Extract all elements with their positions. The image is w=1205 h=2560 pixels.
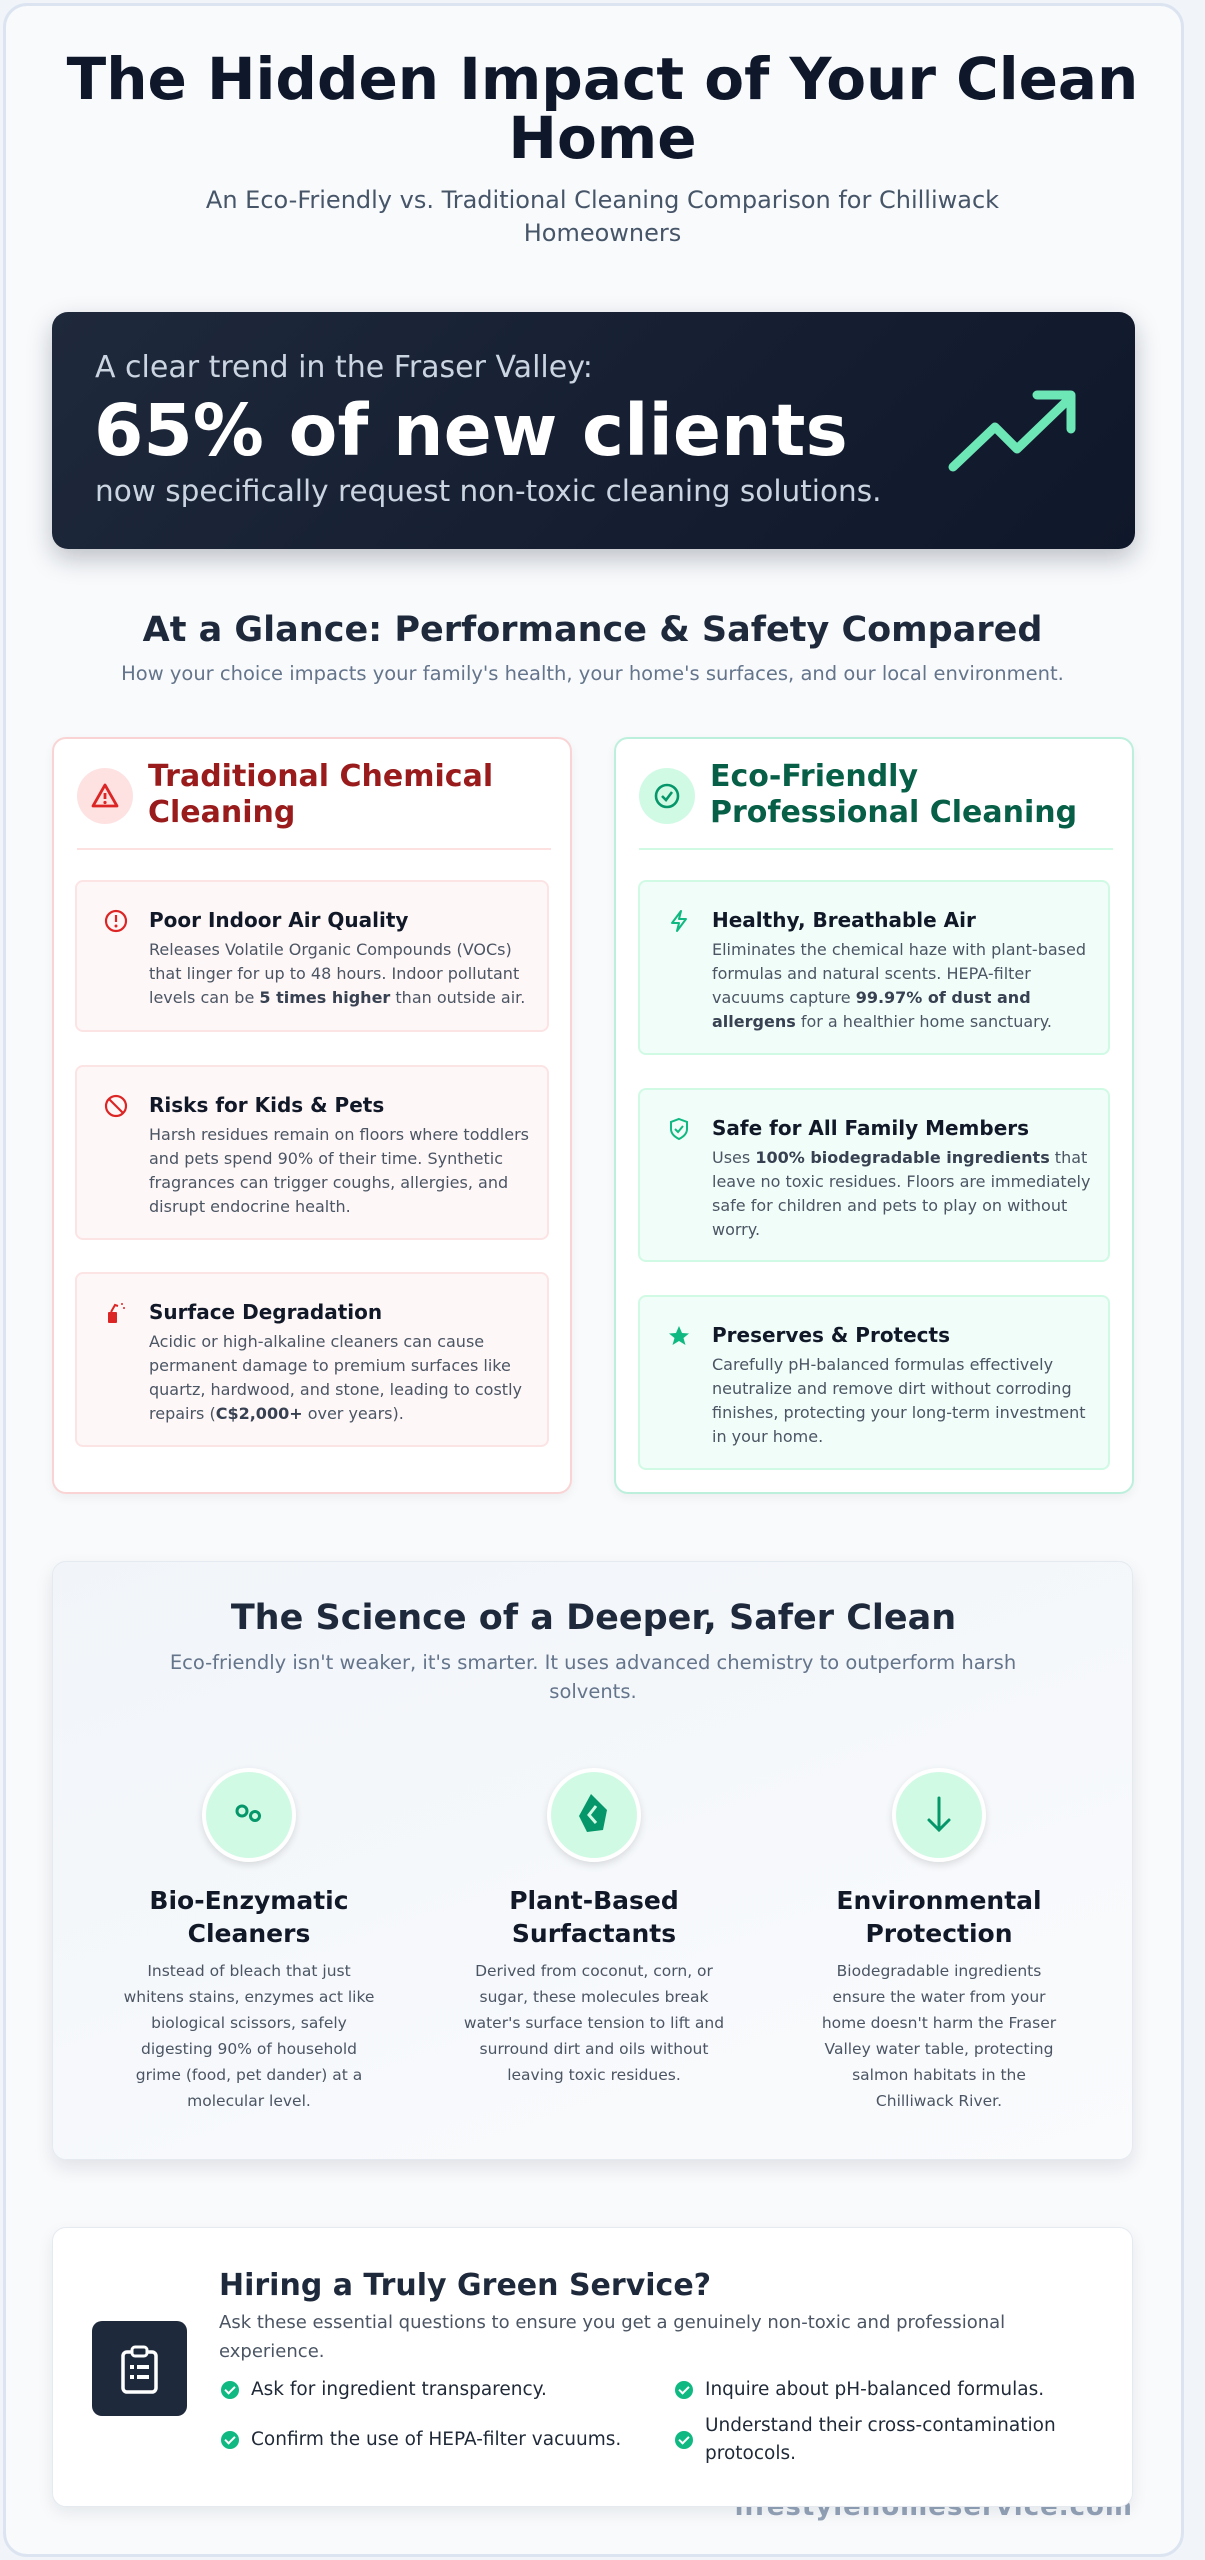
panel: hiring checklist bbox=[52, 2227, 1133, 2507]
icon: enzymes bbox=[202, 1768, 296, 1862]
column: environment: Biodegradable ingredients ensure the water from your home doesn't harm the Fraser Valley water table, protecting salmon habitats in the Chilliwack River. bbox=[822, 1962, 1056, 2110]
column: environment bbox=[822, 1886, 1056, 2110]
item: surface bbox=[75, 1272, 549, 1447]
column: surfactants: Plant-Based bbox=[509, 1886, 679, 1915]
section subtitle: How your choice impacts your family's health, your home's surfaces, and our local environment. bbox=[121, 662, 1064, 685]
icon: star bbox=[669, 1326, 689, 1345]
icon: leaf bbox=[547, 1768, 641, 1862]
item: poor air: Poor Indoor Air Quality bbox=[149, 908, 408, 932]
panel: science bbox=[52, 1561, 1133, 2160]
icon: warning bbox=[77, 768, 133, 824]
checklist: Ask for ingredient transparency. bbox=[251, 2379, 547, 2400]
title: The Hidden Impact of Your Clean Home bbox=[67, 45, 1138, 172]
checklist: Confirm the use of HEPA-filter vacuums. bbox=[251, 2429, 621, 2450]
column: environment: Protection bbox=[865, 1919, 1013, 1948]
icon: check circle bbox=[639, 768, 695, 824]
item: air: Healthy, Breathable Air bbox=[712, 908, 976, 932]
heading: Professional Cleaning bbox=[710, 795, 1077, 830]
heading: Traditional Chemical bbox=[148, 759, 493, 794]
subtitle: An Eco-Friendly vs. Traditional Cleaning Comparison for Chilliwack Homeowners bbox=[206, 186, 999, 247]
item: poor air bbox=[75, 880, 549, 1032]
icon: spray bbox=[108, 1303, 125, 1323]
item: surface: Acidic or high-alkaline cleaners can cause permanent damage to premium surfaces like quartz, hardwood, and stone, leading to costly repairs (C$2,000+ over years). bbox=[149, 1332, 522, 1423]
column: environment: Environmental bbox=[836, 1886, 1042, 1915]
item: surface: Surface Degradation bbox=[149, 1300, 382, 1324]
column: bio-enzymatic bbox=[124, 1886, 374, 2110]
science subtitle: Eco-friendly isn't weaker, it's smarter. It uses advanced chemistry to outperform harsh solvents. bbox=[170, 1651, 1016, 1703]
icon: clipboard bbox=[92, 2321, 187, 2416]
checklist: Inquire about pH-balanced formulas. bbox=[705, 2379, 1044, 2400]
panel: traditional bbox=[52, 737, 572, 1494]
item: kids pets bbox=[75, 1065, 549, 1240]
panel: eco bbox=[614, 737, 1134, 1494]
column: surfactants: Surfactants bbox=[512, 1919, 676, 1948]
item: kids pets: Risks for Kids & Pets bbox=[149, 1093, 384, 1117]
banner follow text: now specifically request non-toxic cleaning solutions. bbox=[95, 474, 881, 508]
column: bio-enzymatic: Bio-Enzymatic bbox=[149, 1886, 349, 1915]
heading bbox=[710, 759, 1077, 830]
banner: stat bbox=[52, 312, 1135, 549]
icon: ban bbox=[104, 1094, 128, 1118]
item: kids pets: Harsh residues remain on floors where toddlers and pets spend 90% of their time. Synthetic fragrances can trigger coughs, allergies, and disrupt endocrine health. bbox=[149, 1125, 529, 1216]
icon: down arrow bbox=[892, 1768, 986, 1862]
item: air bbox=[638, 880, 1110, 1055]
column: bio-enzymatic: Cleaners bbox=[188, 1919, 310, 1948]
icon: trending arrow bbox=[948, 390, 1076, 472]
checklist bbox=[221, 2379, 1056, 2464]
icon: bolt bbox=[671, 910, 687, 932]
item: safe bbox=[638, 1088, 1110, 1262]
heading: Hiring a Truly Green Service? bbox=[219, 2268, 711, 2303]
banner lead text: A clear trend in the Fraser Valley: bbox=[95, 350, 593, 385]
item: safe: Uses 100% biodegradable ingredients that leave no toxic residues. Floors are immediately safe for children and pets to play on without worry. bbox=[712, 1148, 1090, 1239]
section heading: at a glance: At a Glance: Performance & Safety Compared bbox=[143, 610, 1042, 650]
icon: alert bbox=[104, 910, 128, 932]
item: preserves: Preserves & Protects bbox=[712, 1323, 950, 1347]
intro text: Ask these essential questions to ensure you get a genuinely non-toxic and professional experience. bbox=[219, 2312, 1005, 2362]
heading bbox=[148, 759, 493, 830]
heading: Cleaning bbox=[148, 795, 295, 830]
column: surfactants bbox=[464, 1886, 724, 2084]
icon: shield bbox=[670, 1118, 688, 1140]
science heading: The Science of a Deeper, Safer Clean bbox=[231, 1598, 956, 1638]
column: surfactants: Derived from coconut, corn, or sugar, these molecules break water's surface tension to lift and surround dirt and oils without leaving toxic residues. bbox=[464, 1962, 724, 2084]
item: preserves: Carefully pH-balanced formulas effectively neutralize and remove dirt without corroding finishes, protecting your long-term investment in your home. bbox=[712, 1355, 1085, 1446]
item: safe: Safe for All Family Members bbox=[712, 1116, 1029, 1140]
item: air: Eliminates the chemical haze with plant-based formulas and natural scents. HEPA-filter vacuums capture 99.97% of dust and allergens for a healthier home sanctuary. bbox=[712, 940, 1086, 1031]
item: preserves bbox=[638, 1295, 1110, 1470]
item: poor air: Releases Volatile Organic Compounds (VOCs) that linger for up to 48 hours. Indoor pollutant levels can be 5 times higher than outside air. bbox=[149, 940, 525, 1007]
big stat: 65% of new clients bbox=[94, 389, 848, 472]
column: bio-enzymatic: Instead of bleach that just whitens stains, enzymes act like biological scissors, safely digesting 90% of household grime (food, pet dander) at a molecular level. bbox=[124, 1962, 374, 2110]
checklist: Understand their cross-contamination protocols. bbox=[705, 2415, 1056, 2464]
watermark: lifestylehomeservice.com bbox=[735, 2492, 1133, 2522]
heading: Eco-Friendly bbox=[710, 759, 918, 794]
